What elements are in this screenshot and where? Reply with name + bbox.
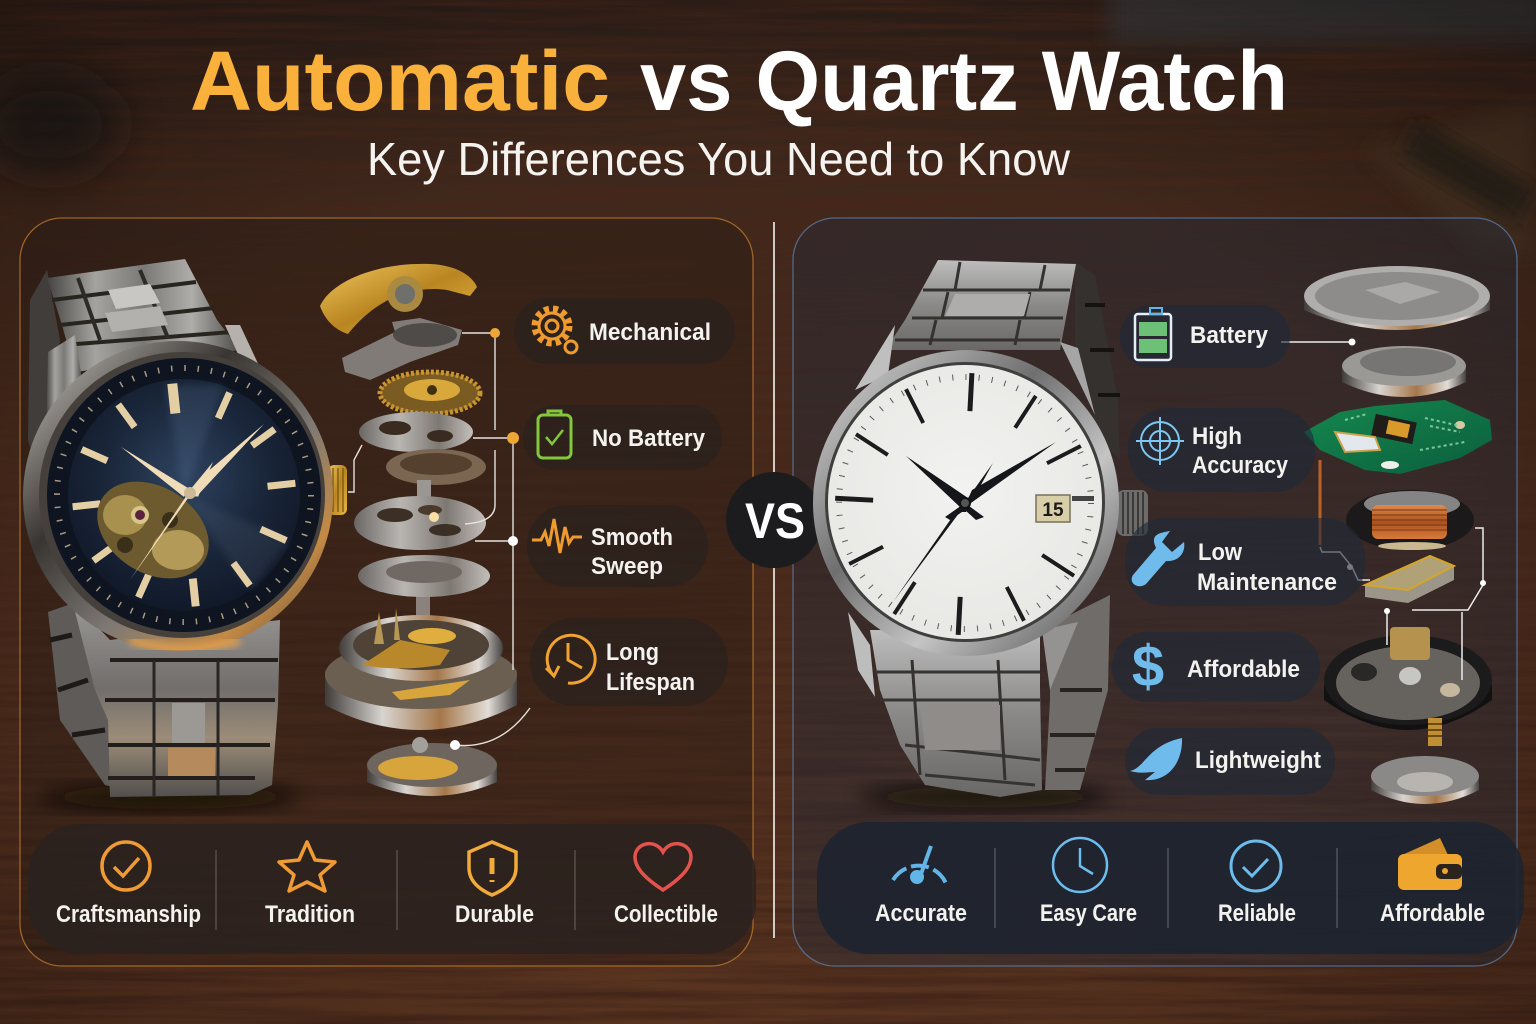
- callout: long lifespan: Long: [606, 639, 659, 666]
- callout: mechanical: Mechanical: [589, 319, 711, 346]
- benefit labels: [875, 900, 1485, 927]
- part: circuit board: [1304, 400, 1492, 474]
- icon: feather: [1130, 738, 1182, 780]
- icon: target: [1136, 417, 1184, 465]
- part: chip: [1365, 556, 1454, 603]
- icon: gear: [535, 309, 577, 353]
- callout: battery: Battery: [1190, 322, 1269, 349]
- watch hands: [893, 442, 1056, 602]
- automatic connector lines: [348, 328, 530, 750]
- callout: lightweight: [1125, 728, 1335, 795]
- callout: affordable: Affordable: [1187, 656, 1300, 683]
- callout: affordable: [1112, 632, 1320, 702]
- rear strap: [1045, 262, 1120, 790]
- part: rotor: [320, 264, 477, 334]
- benefits bar: quartz: [817, 822, 1524, 954]
- benefit labels: Tradition: [265, 901, 355, 928]
- callout: low maintenance: Maintenance: [1197, 569, 1337, 596]
- callout: smooth sweep: [527, 505, 708, 587]
- lower bracelet: [72, 600, 280, 797]
- navy dial: [68, 379, 300, 611]
- icon: check circle: [1231, 841, 1281, 891]
- crown: [1117, 490, 1148, 536]
- quartz movement: exploded parts: [1304, 266, 1492, 804]
- benefits bar: automatic: [28, 824, 756, 954]
- lower bracelet: [848, 612, 1078, 797]
- upper bracelet: [47, 259, 240, 372]
- hour markers: [61, 372, 307, 618]
- part: battery cell: [1342, 346, 1466, 397]
- case and bezel: [23, 341, 333, 651]
- part: barrel: [325, 608, 517, 730]
- part: bronze plate: [386, 449, 486, 485]
- icon: star: [279, 842, 335, 891]
- part: bridge: [342, 318, 462, 380]
- icon: craftsmanship check: [102, 842, 150, 890]
- callout: long lifespan: [530, 618, 728, 706]
- icon: gauge: [893, 846, 947, 886]
- vs badge: VS: [745, 493, 805, 549]
- rear strap: [28, 270, 125, 790]
- icon: shield: [469, 842, 516, 895]
- part: gear: [380, 372, 480, 414]
- lugs: [46, 335, 82, 445]
- vs badge: [726, 472, 822, 568]
- benefit labels: Collectible: [614, 901, 718, 928]
- icon: clock: [546, 635, 595, 683]
- callout: smooth sweep: Sweep: [591, 553, 663, 580]
- title: Automatic: [190, 34, 610, 128]
- panel: quartz: [793, 218, 1517, 966]
- icon: dollar: $: [1132, 634, 1164, 699]
- icon: waveform: [532, 519, 582, 553]
- callout: long lifespan: Lifespan: [606, 669, 695, 696]
- callout: no battery: [523, 405, 722, 470]
- callout: high accuracy: High: [1192, 423, 1242, 450]
- panel: automatic: [20, 218, 753, 966]
- subtitle: Key Differences You Need to Know: [367, 133, 1071, 185]
- benefit labels: Durable: [455, 901, 534, 928]
- white dial: [828, 365, 1102, 639]
- skeleton window: [79, 462, 227, 598]
- benefit labels: Accurate: [875, 900, 967, 927]
- callout: low maintenance: [1125, 518, 1365, 606]
- hour markers: [828, 366, 1085, 641]
- benefit labels: Affordable: [1380, 900, 1485, 927]
- benefit labels: Reliable: [1218, 900, 1296, 927]
- watch hands: [121, 424, 264, 580]
- gold highlight on bezel: [130, 640, 240, 649]
- callout: mechanical: [514, 298, 735, 364]
- callout: no battery: No Battery: [592, 425, 706, 452]
- automatic watch: [23, 259, 347, 809]
- date window: 15: [1042, 500, 1064, 521]
- icon: battery: [1135, 308, 1171, 360]
- title: vs Quartz Watch: [640, 34, 1288, 128]
- callout: high accuracy: Accuracy: [1192, 452, 1289, 479]
- part: bottom cap: [1371, 756, 1479, 804]
- part: base: [367, 737, 497, 796]
- icon: battery check: [538, 411, 571, 458]
- minute track: [839, 377, 1091, 629]
- icon: wallet: [1398, 838, 1462, 890]
- title: [190, 34, 1288, 128]
- part: mainplate: [354, 480, 486, 550]
- callout: battery: [1120, 305, 1290, 368]
- icon: clock: [1053, 838, 1107, 892]
- center divider: [773, 222, 775, 938]
- upper bracelet: [885, 260, 1076, 350]
- benefit labels: Craftsmanship: [56, 901, 201, 928]
- callout: high accuracy: [1128, 408, 1315, 492]
- crown: [328, 465, 347, 515]
- callout: smooth sweep: Smooth: [591, 524, 673, 551]
- minute track: [57, 368, 311, 622]
- icon: heart: [635, 844, 691, 890]
- case and bezel: [813, 350, 1119, 656]
- benefit labels: [56, 901, 718, 928]
- icon: wrench: [1132, 531, 1184, 586]
- part: quartz base movement: [1324, 627, 1492, 746]
- part: case back: [1304, 266, 1490, 330]
- lugs: [855, 325, 895, 390]
- automatic movement: exploded parts: [320, 264, 517, 796]
- callout: low maintenance: Low: [1198, 539, 1242, 566]
- part: coil: [1346, 490, 1474, 550]
- part: lower plate: [358, 555, 490, 624]
- part: plate one: [359, 412, 473, 452]
- quartz watch: [813, 260, 1148, 808]
- callout: lightweight: Lightweight: [1195, 747, 1321, 774]
- date window: [1036, 495, 1094, 522]
- benefit labels: Easy Care: [1040, 900, 1137, 927]
- quartz connector lines: [1281, 338, 1486, 680]
